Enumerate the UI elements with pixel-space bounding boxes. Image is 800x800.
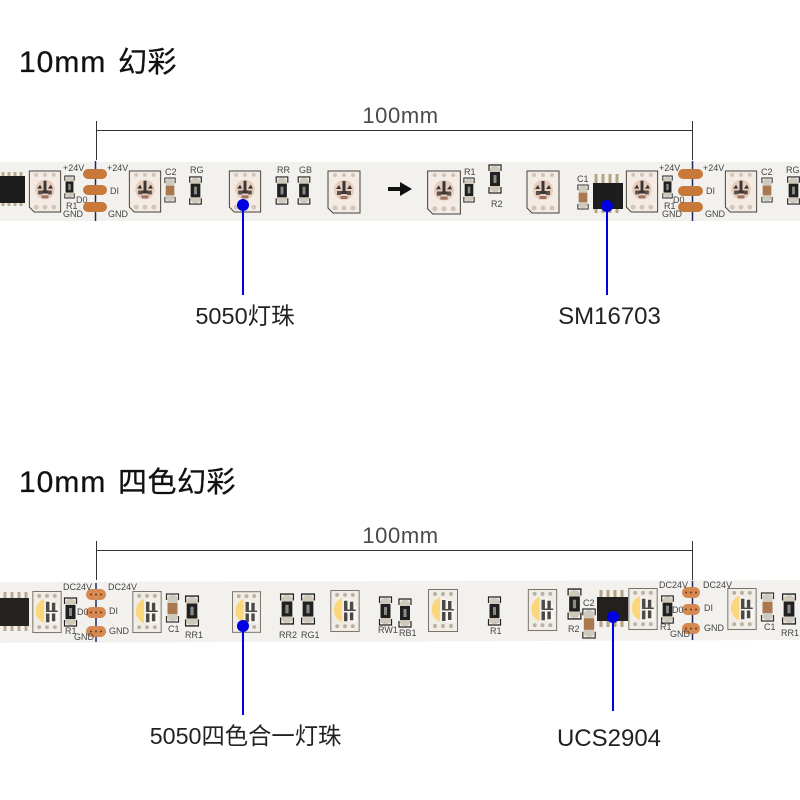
dimension: 100mm bottom: [96, 523, 693, 580]
callout: 5050灯珠: [195, 199, 295, 329]
silkscreen labels: C2: [583, 598, 595, 608]
dimension: 100mm top: 100mm: [362, 103, 439, 128]
silkscreen labels: GND: [108, 209, 128, 219]
callout: SM16703: SM16703: [558, 303, 661, 330]
silkscreen labels: RW1: [378, 625, 398, 635]
solder pads left: [83, 169, 107, 212]
silkscreen labels: RR: [277, 165, 290, 175]
callout: SM16703: [558, 200, 661, 330]
left IC: [0, 172, 25, 206]
silkscreen labels: R1: [664, 201, 676, 211]
silkscreen labels: R2: [491, 199, 503, 209]
LEDs: [29, 171, 757, 214]
direction arrow: [388, 182, 412, 196]
silkscreen labels: GND: [705, 209, 726, 219]
left IC: [0, 592, 29, 631]
silkscreen labels: DC24V: [108, 582, 137, 592]
silkscreen labels: R1: [464, 167, 476, 177]
silkscreen labels: RB1: [399, 628, 417, 638]
silkscreen labels: GND: [74, 632, 94, 642]
silkscreen labels: DI: [704, 603, 713, 613]
dimension: 100mm bottom: 100mm: [362, 523, 439, 548]
title: 10mm 四色幻彩: 四色幻彩: [118, 466, 236, 499]
silkscreen labels: RR1: [781, 628, 799, 638]
silkscreen labels: D0: [673, 195, 685, 205]
silkscreen labels: +24V: [63, 163, 84, 173]
silkscreen labels: DC24V: [703, 580, 732, 590]
title: 10mm 幻彩: 10mm: [19, 46, 106, 79]
silkscreen labels: C2: [165, 167, 177, 177]
LEDs: [33, 588, 756, 633]
silkscreen labels: RR1: [185, 630, 203, 640]
silkscreen labels: C1: [168, 624, 180, 634]
silkscreen labels: [63, 163, 800, 219]
silkscreen labels: DI: [109, 606, 118, 616]
silkscreen labels: DC24V: [63, 582, 92, 592]
silkscreen labels: DI: [110, 186, 119, 196]
dimension: 100mm top: [96, 103, 693, 160]
silkscreen labels: GND: [63, 209, 84, 219]
LED strip: RGBW: [0, 580, 800, 643]
silkscreen labels: D0: [77, 607, 89, 617]
silkscreen labels: RG: [190, 165, 204, 175]
callout: UCS2904: [557, 611, 661, 752]
LED strip: RGB: [0, 161, 800, 221]
silkscreen labels: R2: [568, 624, 580, 634]
silkscreen labels: GND: [670, 629, 690, 639]
silkscreen labels: [63, 580, 799, 642]
title: 10mm 幻彩: 幻彩: [118, 46, 177, 79]
silkscreen labels: GB: [299, 165, 312, 175]
silkscreen labels: C1: [764, 622, 776, 632]
silkscreen labels: R1: [65, 626, 77, 636]
silkscreen labels: GND: [662, 209, 682, 219]
solder pads right: [682, 587, 700, 634]
silkscreen labels: +24V: [659, 163, 680, 173]
solder pads left: [86, 589, 106, 637]
callout: UCS2904: UCS2904: [557, 725, 661, 752]
silkscreen labels: C2: [761, 167, 773, 177]
silkscreen labels: +24V: [107, 163, 128, 173]
title: 10mm 四色幻彩: 10mm: [19, 466, 106, 499]
resistors and capacitors: [64, 589, 795, 638]
callout: 5050灯珠: 5050灯珠: [195, 303, 295, 329]
silkscreen labels: GND: [704, 623, 724, 633]
silkscreen labels: D0: [76, 195, 88, 205]
silkscreen labels: DI: [706, 186, 715, 196]
silkscreen labels: R1: [66, 201, 78, 211]
silkscreen labels: +24V: [703, 163, 724, 173]
IC SM16703: [593, 174, 623, 213]
silkscreen labels: R1: [490, 626, 502, 636]
silkscreen labels: R1: [660, 622, 672, 632]
IC UCS2904: [597, 590, 628, 627]
silkscreen labels: D0: [672, 605, 684, 615]
silkscreen labels: C1: [577, 174, 589, 184]
callout: 5050四色合一灯珠: 5050四色合一灯珠: [150, 723, 341, 749]
silkscreen labels: RG1: [301, 630, 320, 640]
silkscreen labels: GND: [109, 626, 130, 636]
resistors and capacitors: [65, 165, 799, 209]
solder pads right: [678, 169, 703, 212]
silkscreen labels: RR2: [279, 630, 297, 640]
silkscreen labels: DC24V: [659, 580, 688, 590]
silkscreen labels: RG: [786, 165, 800, 175]
callout: 5050四色合一灯珠: [150, 620, 341, 749]
